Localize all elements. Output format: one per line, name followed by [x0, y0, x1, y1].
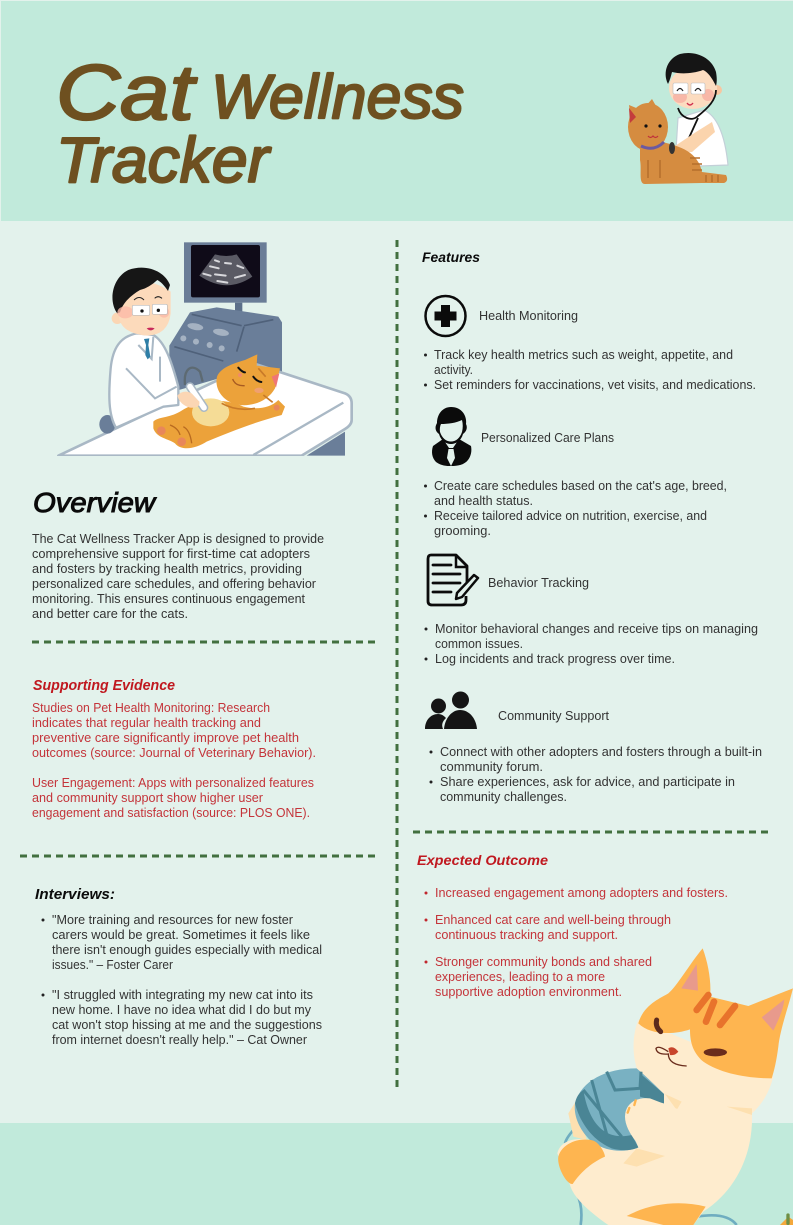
title: Wellness [211, 63, 464, 132]
label: community support: Community Support [498, 709, 609, 723]
icon: two people [425, 692, 477, 729]
heading: expected outcome: Expected Outcome [417, 852, 548, 868]
text: expected outcome bullets: supportive adoption environment. [435, 985, 622, 999]
text: community bullets: community forum. [440, 760, 543, 774]
text: expected outcome bullets [424, 886, 728, 999]
icon: person in suit [432, 407, 471, 466]
exam table [57, 363, 352, 459]
text: supporting evidence body: User Engagement: Apps with personalized features [32, 776, 314, 790]
text: interview quotes: "I struggled with integrating my new cat into its [52, 988, 313, 1002]
text: supporting evidence body: and community support show higher user [32, 791, 263, 805]
text: interview quotes: from internet doesn't really help." – Cat Owner [52, 1033, 307, 1047]
illustration: cat with yarn ball [557, 948, 793, 1225]
text: expected outcome bullets: continuous tracking and support. [435, 928, 618, 942]
text: expected outcome bullets: experiences, leading to a more [435, 970, 605, 984]
vet coat [676, 110, 728, 166]
text: behavior bullets: Log incidents and track progress over time. [435, 652, 675, 666]
text: community bullets: Share experiences, ask for advice, and participate in [440, 775, 735, 789]
text: community bullets [430, 745, 762, 804]
text: community bullets: community challenges. [440, 790, 567, 804]
text: interview quotes: carers would be great. Sometimes it feels like [52, 928, 310, 942]
footer band [0, 1123, 793, 1225]
text: care plan bullets [424, 479, 727, 538]
text: interview quotes: there isn't enough guides especially with medical [52, 943, 322, 957]
text: expected outcome bullets: Enhanced cat care and well-being through [435, 913, 671, 927]
text: overview body: personalized care schedules, and offering behavior [32, 577, 316, 591]
label: personalized care plans: Personalized Care Plans [481, 431, 614, 445]
text: interview quotes: "More training and resources for new foster [52, 913, 293, 927]
cat on table [153, 354, 285, 448]
text: interview quotes [42, 913, 322, 1047]
text: overview body: The Cat Wellness Tracker App is designed to provide [32, 532, 324, 546]
text: interview quotes: issues." – Foster Carer [52, 958, 173, 972]
heading: supporting evidence: Supporting Evidence [33, 678, 175, 694]
text: overview body: comprehensive support for first-time cat adopters [32, 547, 310, 561]
text: supporting evidence body: indicates that regular health tracking and [32, 716, 261, 730]
doctor [99, 268, 178, 434]
label: health monitoring: Health Monitoring [479, 309, 578, 323]
icon: document and pen [428, 555, 478, 605]
text: care plan bullets: Receive tailored advice on nutrition, exercise, and [434, 509, 707, 523]
text: community bullets: Connect with other adopters and fosters through a built-in [440, 745, 762, 759]
text: expected outcome bullets: Increased engagement among adopters and fosters. [435, 886, 728, 900]
text: overview body: and fosters by tracking health metrics, providing [32, 562, 302, 576]
text: care plan bullets: and health status. [434, 494, 533, 508]
text: interview quotes: cat won't stop hissing at me and the suggestions [52, 1018, 322, 1032]
text: care plan bullets: Create care schedules based on the cat's age, breed, [434, 479, 727, 493]
title: Tracker [56, 124, 272, 196]
text: overview body: and better care for the cats. [32, 607, 188, 621]
text: health monitoring bullets: Track key health metrics such as weight, appetite, and [434, 348, 733, 362]
illustration: vet with stethoscope and cat [628, 53, 728, 184]
illustration: vet doing ultrasound on cat [57, 242, 352, 459]
heading: interviews: Interviews: [35, 887, 115, 903]
cat head and body [557, 1020, 773, 1225]
text: health monitoring bullets [424, 348, 756, 392]
label: behavior tracking: Behavior Tracking [488, 576, 589, 590]
text: behavior bullets: Monitor behavioral changes and receive tips on managing [435, 622, 758, 636]
text: overview body: monitoring. This ensures continuous engagement [32, 592, 305, 606]
heading: features: Features [422, 250, 480, 265]
ultrasound monitor [184, 242, 267, 319]
text: supporting evidence body: Studies on Pet Health Monitoring: Research [32, 701, 270, 715]
header band [1, 1, 793, 221]
text: expected outcome bullets: Stronger community bonds and shared [435, 955, 652, 969]
ultrasound machine [169, 307, 282, 392]
icon: health cross [426, 296, 466, 336]
text: supporting evidence body: engagement and satisfaction (source: PLOS ONE). [32, 806, 310, 820]
yarn ball [575, 1068, 664, 1151]
text: supporting evidence body [32, 701, 316, 820]
title: Cat [56, 48, 198, 136]
text: health monitoring bullets: Set reminders for vaccinations, vet visits, and medications. [434, 378, 756, 392]
text: care plan bullets: grooming. [434, 524, 491, 538]
text: behavior bullets [424, 622, 758, 666]
title [56, 48, 464, 196]
text: interview quotes: new home. I have no idea what did I do but my [52, 1003, 312, 1017]
heading: overview: Overview [33, 487, 157, 518]
cat [628, 99, 727, 184]
text: behavior bullets: common issues. [435, 637, 523, 651]
text: overview body [32, 532, 324, 621]
vet head [666, 53, 722, 109]
text: supporting evidence body: outcomes (source: Journal of Veterinary Behavior). [32, 746, 316, 760]
text: supporting evidence body: preventive care significantly improve pet health [32, 731, 299, 745]
text: health monitoring bullets: activity. [434, 363, 473, 377]
